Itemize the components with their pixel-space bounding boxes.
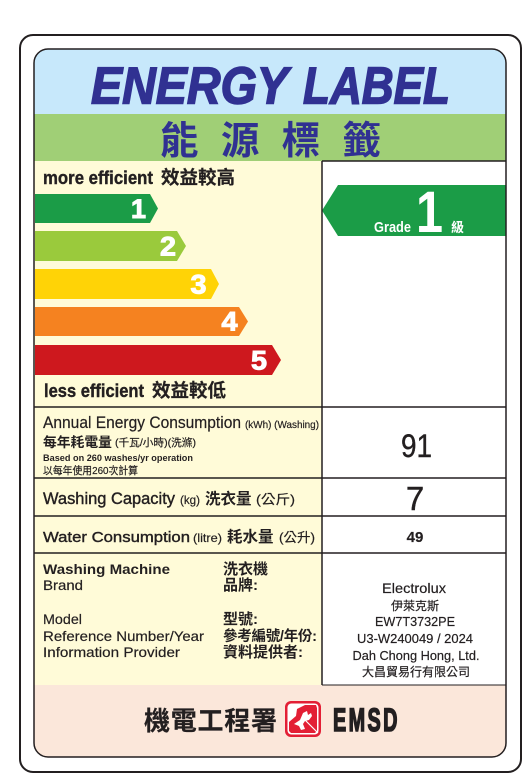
- grade indicator arrow: 1: [416, 180, 443, 245]
- value: washing capacity: 7: [406, 480, 424, 517]
- product info labels: chinese: 洗衣機: [223, 560, 268, 578]
- product info values: 大昌貿易行有限公司: [362, 665, 470, 679]
- product info labels: chinese: 資料提供者:: [223, 643, 303, 661]
- title: ENERGY LABEL: [91, 58, 450, 116]
- grade bar 1: 1: [131, 194, 146, 224]
- row: annual energy consumption: (千瓦/小時)(洗滌): [115, 436, 196, 449]
- product info values: 伊萊克斯: [391, 599, 439, 613]
- grade bar 1: [35, 194, 158, 224]
- product info labels: english: Brand: [43, 577, 83, 593]
- row: water consumption: Water Consumption: [43, 529, 190, 546]
- product info labels: english: [43, 561, 204, 660]
- footer: EMSD wordmark: EMSD: [333, 702, 397, 738]
- row: annual energy consumption: 每年耗電量: [43, 434, 112, 450]
- grade bar 4: 4: [222, 306, 238, 336]
- row: annual energy consumption: (kWh) (Washing): [245, 419, 319, 431]
- grade bar 2: [35, 231, 186, 262]
- heading: more efficient: [43, 167, 235, 188]
- value: annual energy: 91: [401, 428, 432, 464]
- product info values: [352, 580, 480, 679]
- heading: less efficient: 效益較低: [152, 380, 227, 401]
- header band: english title: [34, 49, 506, 114]
- grade bar 5: 5: [251, 346, 267, 376]
- row: annual energy consumption: [43, 413, 319, 477]
- left column background: [34, 161, 322, 685]
- product info labels: english: Washing Machine: [43, 561, 170, 577]
- row: washing capacity: 洗衣量: [205, 489, 252, 508]
- table grid lines: [34, 161, 506, 685]
- title: chinese: 能源標籤: [160, 120, 381, 163]
- row: water consumption: (litre): [193, 531, 222, 545]
- right column background: [322, 161, 506, 685]
- product info values: Dah Chong Hong, Ltd.: [352, 648, 480, 663]
- grade bar 3: [35, 269, 219, 300]
- row: washing capacity: (kg): [180, 493, 200, 507]
- row: annual energy consumption: 以每年使用260次計算: [43, 464, 138, 477]
- grade bar 5: [35, 345, 281, 376]
- row: washing capacity: (公斤): [256, 492, 295, 507]
- heading: less efficient: [44, 380, 227, 401]
- grade indicator arrow: [322, 180, 506, 245]
- product info labels: english: Model: [43, 611, 82, 627]
- product info values: Electrolux: [382, 580, 446, 596]
- header band: chinese title: [34, 114, 506, 161]
- product info labels: english: Information Provider: [43, 644, 180, 660]
- row: washing capacity: Washing Capacity: [43, 490, 176, 508]
- grade indicator arrow: 級: [451, 220, 464, 235]
- grade bar 4: [35, 306, 248, 336]
- row: annual energy consumption: Based on 260 washes/yr operation: [43, 453, 193, 464]
- icon: EMSD logo: [285, 701, 321, 737]
- row: annual energy consumption: Annual Energy Consumption: [43, 413, 241, 432]
- footer: department name: 機電工程署: [144, 706, 277, 736]
- row: washing capacity: [43, 489, 295, 508]
- row: water consumption: (公升): [279, 530, 315, 545]
- title: ENERGY LABEL: LABEL: [303, 58, 450, 116]
- product info labels: chinese: 品牌:: [223, 577, 258, 594]
- product info values: EW7T3732PE: [375, 614, 455, 629]
- product info labels: chinese: 參考編號/年份:: [223, 627, 317, 645]
- grade bar 2: 2: [160, 232, 176, 262]
- row: water consumption: 耗水量: [227, 528, 274, 546]
- footer band: [34, 685, 506, 757]
- grade bar 3: 3: [190, 270, 206, 300]
- value: water consumption: 49: [407, 529, 423, 546]
- product info values: U3-W240049 / 2024: [357, 631, 473, 646]
- grade indicator arrow: Grade: [374, 219, 411, 236]
- product info labels: chinese: 型號:: [223, 610, 258, 628]
- row: water consumption: [43, 528, 315, 546]
- title: ENERGY LABEL: ENERGY: [91, 58, 292, 116]
- heading: more efficient: more efficient: [43, 168, 153, 188]
- heading: less efficient: less efficient: [44, 381, 144, 401]
- product info labels: chinese: [223, 560, 317, 661]
- product info labels: english: Reference Number/Year: [43, 628, 204, 644]
- heading: more efficient: 效益較高: [161, 167, 235, 188]
